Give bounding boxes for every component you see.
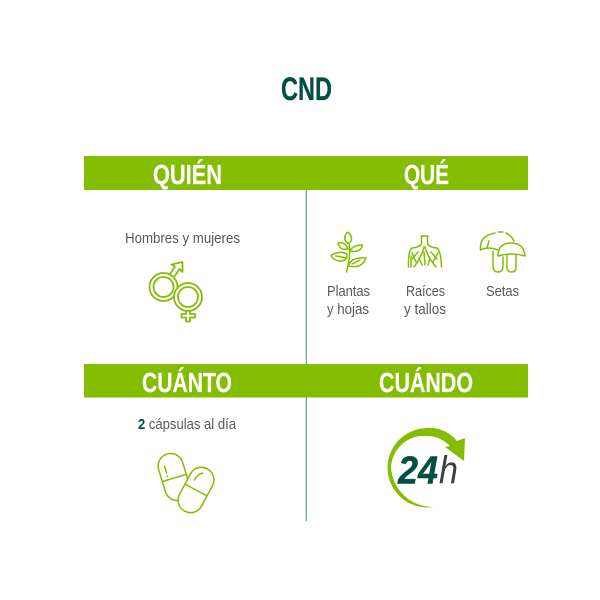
icon: 24h circular arrow: 24 <box>397 450 438 492</box>
heading: qué: QUÉ <box>404 159 449 190</box>
text: setas: Setas <box>486 283 519 300</box>
heading: cuándo: CUÁNDO <box>379 367 473 398</box>
text: plantas y hojas: Plantas <box>327 283 370 300</box>
text: 2 cápsulas al día: 2 cápsulas al día <box>138 416 237 433</box>
icon: mushrooms <box>480 232 525 272</box>
icon: 24h circular arrow: h <box>439 450 458 492</box>
icon: 24h circular arrow <box>387 428 465 508</box>
panel: cuándo <box>306 364 528 508</box>
text: plantas y hojas: y hojas <box>327 301 369 318</box>
heading: cuánto: CUÁNTO <box>142 367 232 398</box>
icon: roots <box>408 236 442 267</box>
vertical divider <box>306 190 307 521</box>
text: raíces y tallos: y tallos <box>404 301 446 318</box>
panel: cuánto <box>84 364 306 517</box>
header bar: cuánto <box>84 364 306 398</box>
text: raíces y tallos: Raíces <box>406 283 445 300</box>
icon: gender symbols <box>150 262 202 322</box>
header bar: cuándo <box>306 364 528 398</box>
title: CND <box>281 71 332 107</box>
header bar: qué <box>306 156 528 190</box>
header bar: quién <box>84 156 306 190</box>
text: plantas y hojas <box>327 283 370 318</box>
text: hombres y mujeres: Hombres y mujeres <box>125 230 240 247</box>
text: raíces y tallos <box>404 283 446 318</box>
icon: capsules <box>155 450 218 517</box>
panel: qué <box>306 156 528 318</box>
panel: quién <box>84 156 306 322</box>
heading: quién: QUIÉN <box>153 159 222 190</box>
icon: plant <box>331 232 366 272</box>
